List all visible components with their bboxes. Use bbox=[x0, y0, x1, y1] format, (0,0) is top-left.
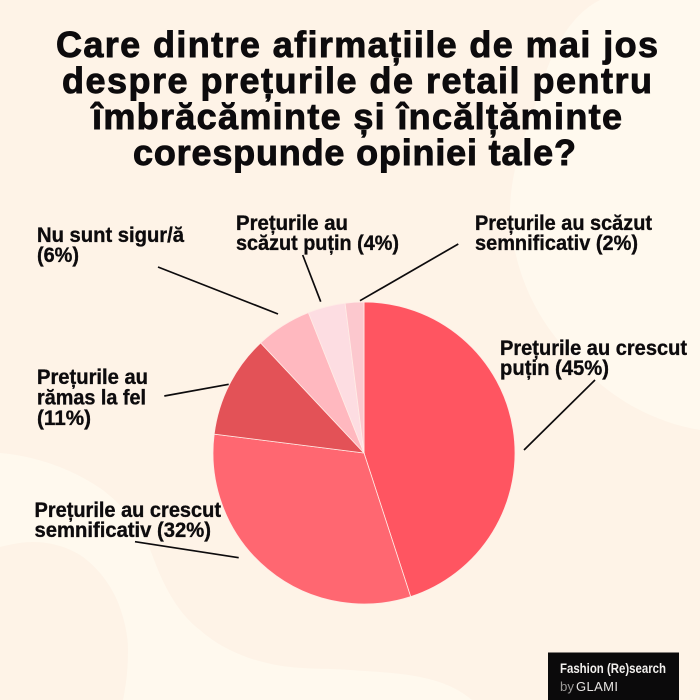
logo: Fashion (Re)search by GLAMI bbox=[548, 652, 679, 700]
logo: Fashion (Re)search by GLAMI: by bbox=[560, 680, 575, 694]
slice: prețurile au rămas la fel 11% bbox=[214, 343, 364, 453]
label: prețurile au rămas la fel: rămas la fel bbox=[37, 386, 146, 410]
label: prețurile au crescut semnificativ: semnificativ (32%) bbox=[34, 518, 211, 542]
title: corespunde opiniei tale? bbox=[133, 132, 576, 173]
label: prețurile au crescut puțin bbox=[500, 336, 687, 380]
label: prețurile au scăzut semnificativ: semnificativ (2%) bbox=[475, 231, 638, 255]
label: prețurile au crescut semnificativ bbox=[34, 498, 221, 542]
label: prețurile au crescut puțin: Prețurile au crescut bbox=[500, 336, 687, 360]
slice: prețurile au crescut puțin 45% bbox=[364, 302, 515, 597]
pie chart bbox=[213, 302, 515, 604]
title: despre prețurile de retail pentru bbox=[62, 60, 652, 102]
label: prețurile au scăzut puțin bbox=[236, 211, 399, 255]
label: nu sunt sigur: Nu sunt sigur/ă bbox=[37, 223, 185, 247]
label: prețurile au crescut puțin: puțin (45%) bbox=[500, 356, 609, 380]
label: prețurile au rămas la fel: (11%) bbox=[37, 406, 91, 430]
label: prețurile au scăzut puțin: Prețurile au bbox=[236, 211, 348, 235]
label: prețurile au scăzut semnificativ bbox=[475, 211, 652, 255]
logo: Fashion (Re)search by GLAMI: GLAMI bbox=[576, 679, 618, 694]
leader lines bbox=[135, 244, 595, 558]
title: Care dintre afirmațiile de mai jos bbox=[56, 24, 658, 66]
logo: Fashion (Re)search by GLAMI: Fashion (Re)search bbox=[560, 661, 666, 676]
title bbox=[56, 24, 658, 173]
label: nu sunt sigur: (6%) bbox=[37, 243, 79, 267]
label: nu sunt sigur bbox=[37, 223, 185, 267]
label: prețurile au crescut semnificativ: Prețurile au crescut bbox=[34, 498, 221, 522]
slice: prețurile au scăzut puțin 4% bbox=[308, 303, 364, 453]
label: prețurile au rămas la fel: Prețurile au bbox=[37, 365, 148, 389]
label: prețurile au scăzut semnificativ: Prețurile au scăzut bbox=[475, 211, 652, 235]
slice: prețurile au crescut semnificativ 32% bbox=[213, 434, 411, 604]
label: prețurile au rămas la fel bbox=[37, 365, 148, 430]
title: îmbrăcăminte și încălțăminte bbox=[90, 96, 622, 138]
slice: prețurile au scăzut semnificativ 2% bbox=[345, 302, 364, 453]
label: prețurile au scăzut puțin: scăzut puțin (4%) bbox=[236, 231, 399, 255]
slice: nu sunt sigur/ă 6% bbox=[261, 313, 364, 453]
